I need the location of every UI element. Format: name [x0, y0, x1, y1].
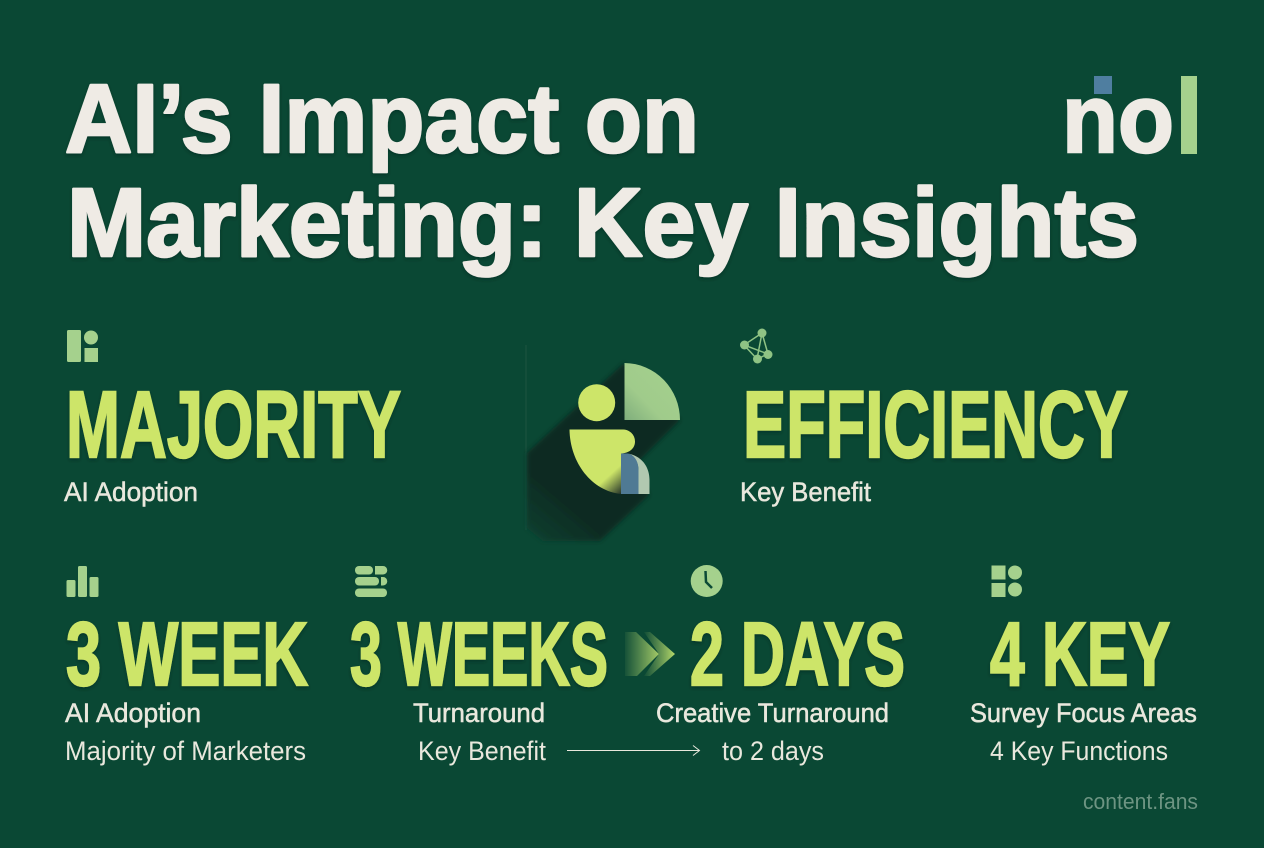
label: majority of marketers: Majority of Marketers: [65, 736, 306, 766]
label: creative turnaround: Creative Turnaround: [656, 698, 889, 728]
icon: layout blocks: [67, 330, 98, 362]
label: turnaround: Turnaround: [413, 698, 545, 728]
label: to 2 days: to 2 days: [722, 736, 824, 766]
stat: 4 key: [970, 566, 1197, 766]
icon: clock: [691, 565, 723, 597]
figure: 2 days: 2 DAYS: [690, 605, 905, 705]
label: ai adoption: AI Adoption: [64, 477, 198, 507]
figure: 3 week: 3 WEEK: [66, 605, 308, 705]
central illustration: [526, 345, 680, 541]
figure: 3 weeks: 3 WEEKS: [350, 605, 608, 705]
icon: network: [740, 328, 772, 364]
stat: 2 days: [656, 565, 905, 766]
label: ai adoption: AI Adoption: [65, 698, 201, 728]
title: AI’s Impact on: [65, 64, 699, 173]
icon: bar chart: [66, 566, 98, 597]
label: key benefit: Key Benefit: [740, 477, 871, 507]
icon: stacked bars: [355, 566, 387, 597]
label: survey focus areas: Survey Focus Areas: [970, 698, 1197, 728]
heading: majority: MAJORITY: [66, 372, 401, 478]
title: Marketing: Key Insights: [67, 168, 1139, 277]
label: key benefit: Key Benefit: [418, 736, 546, 766]
icon: grid: [992, 566, 1022, 597]
figure: 4 key: 4 KEY: [990, 605, 1170, 705]
panel: efficiency: [740, 328, 1128, 507]
stat: 3 week: [65, 566, 308, 766]
panel: majority: [64, 330, 401, 507]
stat: 3 weeks: [350, 566, 608, 766]
logo: no: [1062, 64, 1174, 173]
label: 4 key functions: 4 Key Functions: [990, 736, 1168, 766]
title: [65, 64, 1139, 277]
arrow: thin line: [567, 746, 700, 756]
arrow: double chevron: [625, 632, 675, 676]
source credit: content.fans: [1083, 789, 1198, 814]
